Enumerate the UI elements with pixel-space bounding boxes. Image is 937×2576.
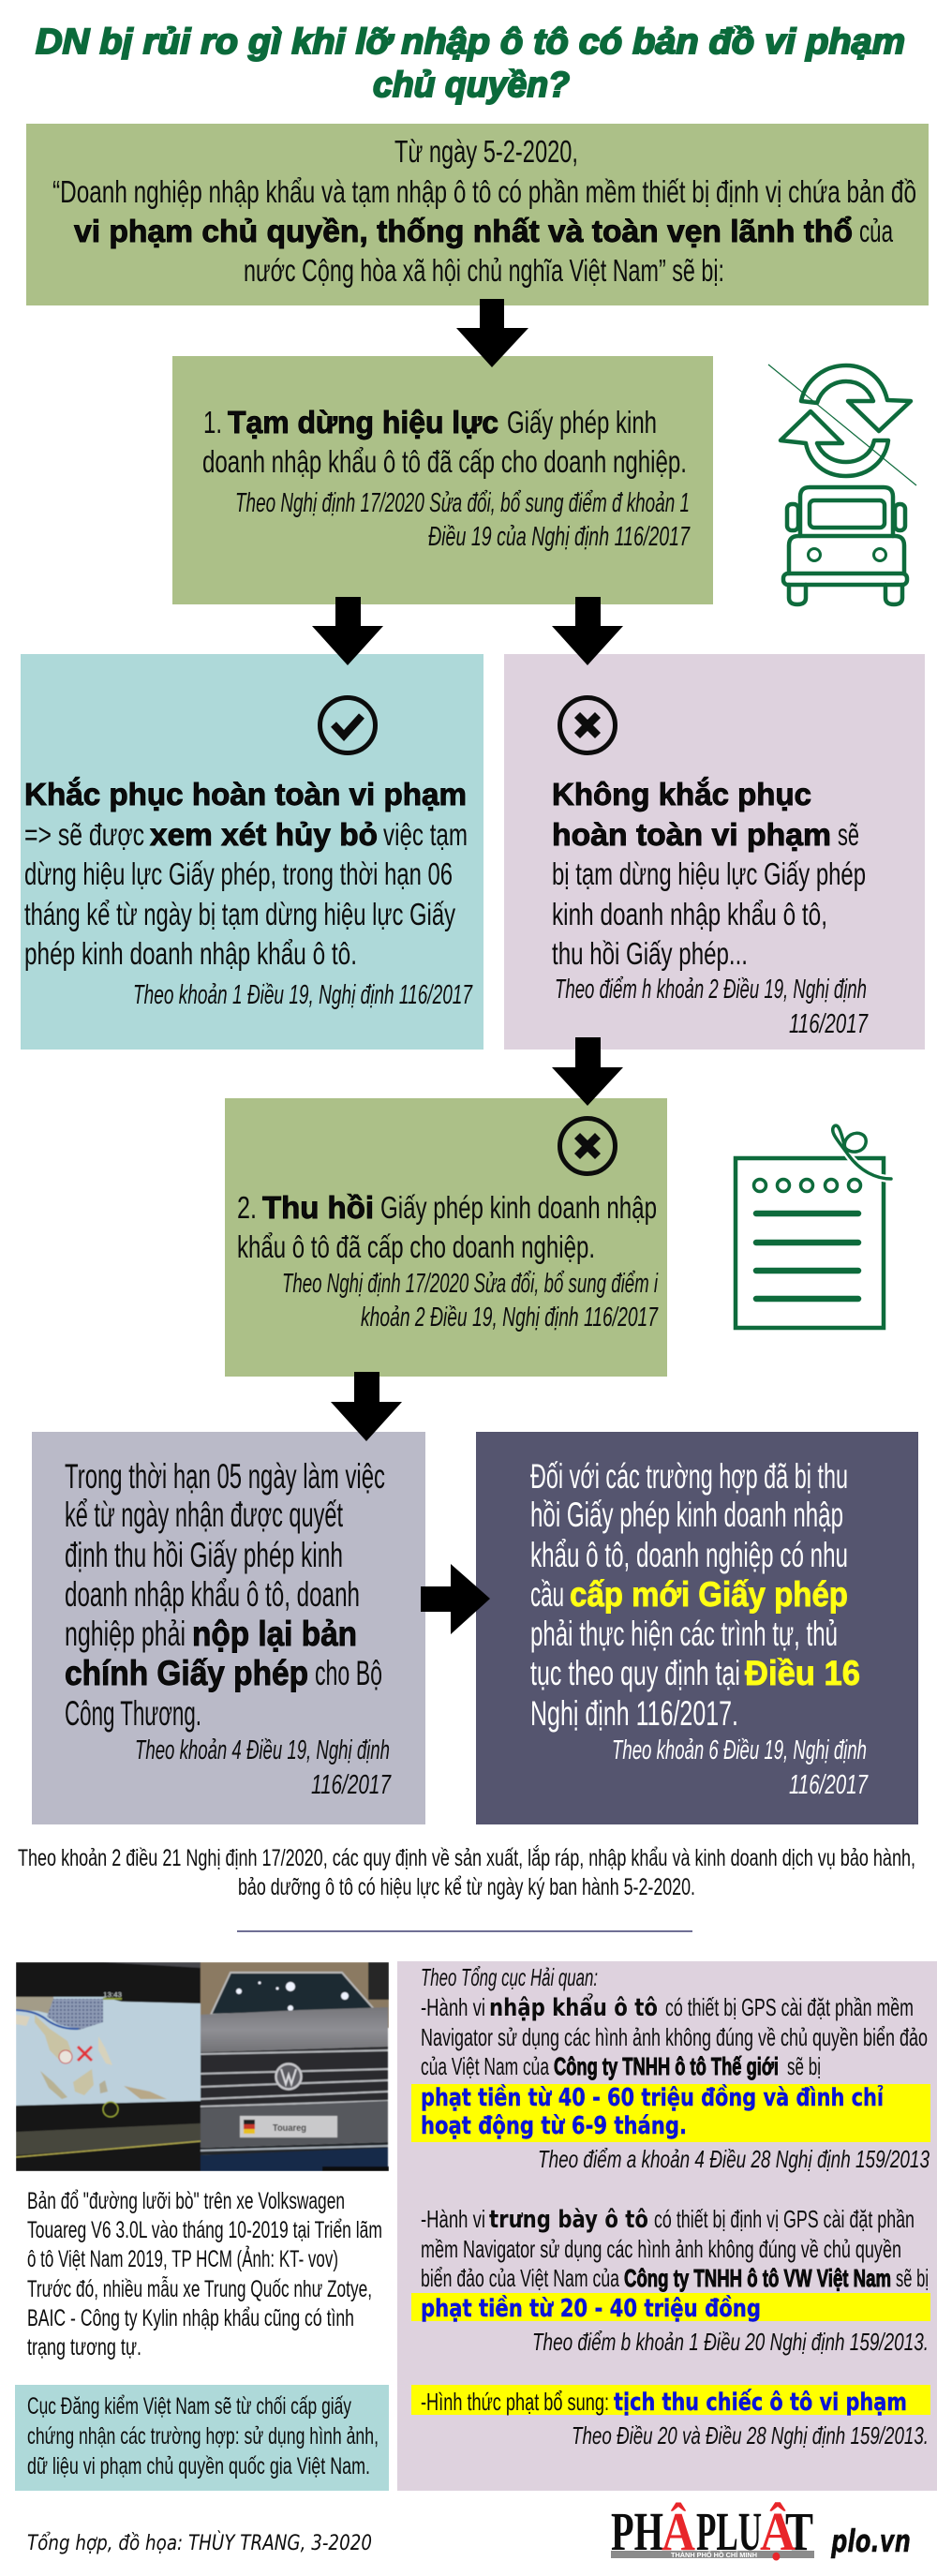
- panel: new licence: cấp mới Giấy phép: [570, 1575, 848, 1614]
- panel: new licence: 116/2017: [789, 1770, 869, 1800]
- panel: new licence: [476, 1432, 918, 1824]
- panel: return licence: Trong thời hạn 05 ngày làm việc: [65, 1457, 385, 1496]
- panel: full remedy: Khắc phục hoàn toàn vi phạm: [24, 777, 467, 812]
- panel: customs penalties: Theo Tổng cục Hải quan:: [421, 1963, 598, 1991]
- panel: return licence: nghiệp phải: [65, 1615, 186, 1653]
- panel: new licence: Điều 16: [745, 1654, 860, 1692]
- panel: return licence: doanh nhập khẩu ô tô, doanh: [65, 1575, 360, 1614]
- panel: step 1 suspend: Điều 19 của Nghị định 116/2017: [428, 522, 691, 552]
- credit: Tổng hợp, đồ họa: THÙY TRANG, 3-2020: [27, 2531, 372, 2555]
- arrow: step 1 to no remedy: [552, 597, 623, 665]
- panel: full remedy: việc tạm: [383, 817, 468, 852]
- arrow: step 2 to return licence: [331, 1372, 402, 1441]
- label: time: 13:43: [103, 1992, 122, 1999]
- icon: cross circle on step 2: [560, 1119, 615, 1173]
- panel: step 1 suspend: doanh nhập khẩu ô tô đã cấp cho doanh nghiệp.: [202, 444, 687, 479]
- note: effective date: [18, 1844, 915, 1900]
- panel: step 2 revoke: 2.: [237, 1190, 257, 1225]
- arrow: return licence to new licence: [421, 1564, 490, 1634]
- highlight: first fine: hoạt động từ 6-9 tháng.: [421, 2112, 687, 2140]
- title: chủ quyền?: [373, 66, 570, 105]
- panel: return licence: định thu hồi Giấy phép kinh: [65, 1536, 343, 1574]
- panel: intro: của: [859, 214, 893, 248]
- photo: navigation screen: [16, 1962, 201, 2171]
- panel: intro: Từ ngày 5-2-2020,: [394, 134, 578, 169]
- panel: customs penalties: nhập khẩu ô tô: [489, 1991, 658, 2022]
- icon: truck: [783, 487, 907, 604]
- arrow: step 1 to full remedy: [312, 597, 383, 665]
- panel: no remedy: sẽ: [838, 817, 859, 852]
- panel: step 1 suspend: [172, 356, 713, 604]
- note: effective date: bảo dưỡng ô tô có hiệu lực kể từ ngày ký ban hành 5-2-2020.: [238, 1874, 695, 1900]
- panel: return licence: nộp lại bản: [192, 1615, 357, 1653]
- panel: full remedy: xem xét hủy bỏ: [150, 817, 378, 852]
- panel: customs penalties: [397, 1961, 937, 2491]
- icon: cross circle: [560, 697, 615, 753]
- panel: registry refusal: chứng nhận các trường hợp: sử dụng hình ảnh,: [27, 2423, 379, 2449]
- title: [36, 22, 905, 105]
- panel: customs penalties: sẽ bị: [787, 2052, 821, 2080]
- panel: step 2 revoke: khoản 2 Điều 19, Nghị định 116/2017: [361, 1303, 659, 1333]
- panel: no remedy: kinh doanh nhập khẩu ô tô,: [552, 897, 827, 931]
- panel: no remedy: 116/2017: [789, 1009, 869, 1039]
- panel: no remedy: Không khắc phục: [552, 777, 811, 812]
- panel: no remedy: hoàn toàn vi phạm: [552, 817, 831, 852]
- logo: Pháp Luật: [611, 2501, 814, 2562]
- panel: new licence: cầu: [530, 1575, 564, 1614]
- panel: step 1 suspend: Theo Nghị định 17/2020 Sửa đổi, bổ sung điểm đ khoản 1: [235, 488, 690, 518]
- panel: registry refusal: [15, 2385, 389, 2491]
- panel: intro: vi phạm chủ quyền, thống nhất và toàn vẹn lãnh thổ: [74, 214, 853, 248]
- panel: return licence: [32, 1432, 425, 1824]
- caption: photo: [27, 2188, 382, 2360]
- panel: customs penalties: biển đảo của Việt Nam của: [421, 2264, 619, 2292]
- photo: car: [201, 1962, 389, 2171]
- logo: Pháp Luật: PH: [611, 2501, 663, 2562]
- panel: return licence: Theo khoản 4 Điều 19, Nghị định: [135, 1735, 390, 1765]
- panel: no remedy: thu hồi Giấy phép...: [552, 936, 748, 971]
- panel: customs penalties: -Hành vi: [421, 1993, 485, 2021]
- panel: customs penalties: Công ty TNHH ô tô Thế giới: [554, 2052, 779, 2080]
- highlight: second fine: phạt tiền từ 20 - 40 triệu đồng: [421, 2294, 761, 2323]
- panel: full remedy: => sẽ được: [24, 817, 144, 852]
- logo: Pháp Luật: T: [785, 2501, 813, 2562]
- panel: intro: [26, 124, 929, 305]
- panel: new licence: tục theo quy định tại: [530, 1654, 740, 1692]
- logo: Pháp Luật: Â: [662, 2501, 695, 2562]
- caption: photo: BAIC - Công ty Kylin nhập khẩu cũng có tình: [27, 2305, 354, 2331]
- highlight: additional penalty: [411, 2385, 930, 2417]
- panel: full remedy: [21, 654, 483, 1050]
- caption: photo: ô tô Việt Nam 2019, TP HCM (Ảnh: KT- vov): [27, 2244, 338, 2272]
- panel: step 1 suspend: 1.: [203, 405, 222, 439]
- arrow: no remedy to step 2: [552, 1037, 623, 1106]
- logo: Pháp Luật: Ậ: [760, 2501, 796, 2562]
- logo: plo.vn: plo.vn: [830, 2523, 911, 2559]
- panel: step 2 revoke: [225, 1098, 667, 1377]
- caption: photo: Bản đổ "đường lưỡi bò" trên xe Volkswagen: [27, 2188, 345, 2214]
- panel: full remedy: dừng hiệu lực Giấy phép, trong thời hạn 06: [24, 856, 453, 891]
- logo: Pháp Luật: THÀNH PHỐ HỒ CHÍ MINH: [671, 2550, 757, 2559]
- panel: return licence: kể từ ngày nhận được quyết: [65, 1496, 343, 1534]
- highlight: additional penalty: -Hình thức phạt bổ sung:: [421, 2388, 609, 2416]
- panel: step 2 revoke: Theo Nghị định 17/2020 Sửa đổi, bổ sung điểm i: [282, 1269, 659, 1299]
- caption: photo: Touareg V6 3.0L vào tháng 10-2019 tại Triển lãm: [27, 2217, 382, 2243]
- panel: no remedy: [504, 654, 925, 1050]
- panel: intro: nước Cộng hòa xã hội chủ nghĩa Việt Nam” sẽ bị:: [244, 253, 724, 288]
- panel: return licence: 116/2017: [311, 1770, 392, 1800]
- panel: return licence: Công Thương.: [65, 1694, 201, 1733]
- panel: return licence: chính Giấy phép: [65, 1654, 308, 1692]
- panel: step 1 suspend: Giấy phép kinh: [507, 405, 657, 439]
- panel: full remedy: Theo khoản 1 Điều 19, Nghị định 116/2017: [133, 980, 473, 1010]
- panel: step 1 suspend: Tạm dừng hiệu lực: [228, 405, 498, 439]
- panel: new licence: Nghị định 116/2017.: [530, 1694, 738, 1733]
- photo: navigation map and car: [16, 1962, 389, 2171]
- arrow: intro to step 1: [456, 299, 528, 367]
- panel: customs penalties: của Việt Nam của: [421, 2052, 549, 2080]
- icon: recycle arrows with strike line: [768, 365, 916, 485]
- highlight: first fine: [411, 2083, 930, 2142]
- panel: return licence: cho Bộ: [315, 1654, 382, 1692]
- caption: photo: trạng tương tự.: [27, 2334, 141, 2360]
- panel: full remedy: tháng kể từ ngày bị tạm dừng hiệu lực Giấy: [24, 897, 455, 931]
- title: DN bị rủi ro gì khi lỡ nhập ô tô có bản đồ vi phạm: [36, 22, 905, 62]
- icon: check circle: [320, 697, 375, 753]
- caption: photo: Trước đó, nhiều mẫu xe Trung Quốc như Zotye,: [27, 2275, 372, 2302]
- panel: registry refusal: Cục Đăng kiểm Việt Nam sẽ từ chối cấp giấy: [27, 2393, 351, 2420]
- label: model plate: Touareg: [273, 2123, 306, 2134]
- panel: step 2 revoke: Giấy phép kinh doanh nhập: [380, 1190, 657, 1225]
- logo: Pháp Luật: PLU: [696, 2501, 762, 2562]
- panel: registry refusal: dữ liệu vi phạm chủ quyền quốc gia Việt Nam.: [27, 2453, 370, 2479]
- panel: full remedy: phép kinh doanh nhập khẩu ô tô.: [24, 936, 357, 971]
- panel: customs penalties: trưng bày ô tô: [489, 2206, 648, 2234]
- icon: notepad: [736, 1125, 891, 1328]
- panel: customs penalties: -Hành vi: [421, 2205, 485, 2233]
- panel: step 2 revoke: khẩu ô tô đã cấp cho doanh nghiệp.: [237, 1229, 595, 1264]
- panel: step 2 revoke: Thu hồi: [262, 1190, 374, 1225]
